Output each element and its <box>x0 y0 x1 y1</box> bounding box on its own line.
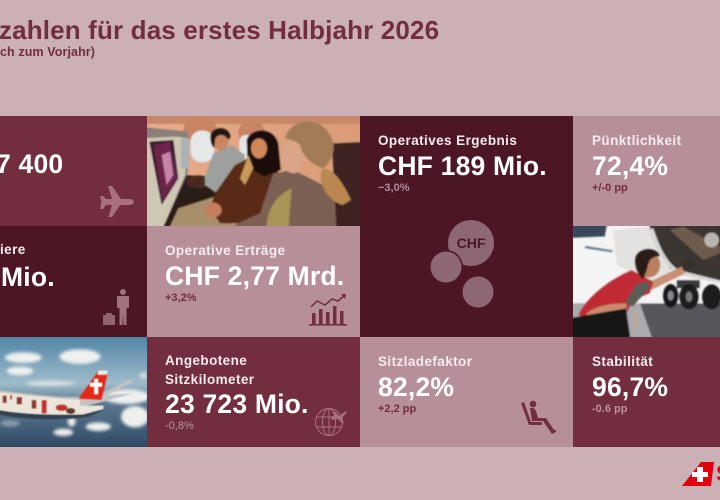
icon: rising chart <box>309 294 347 326</box>
load factor label: Sitzladefaktor <box>378 354 472 369</box>
panel: operating revenue <box>147 226 360 337</box>
result value: CHF 189 Mio. <box>378 151 547 181</box>
icon: passenger seat <box>521 400 556 434</box>
icon: globe with airplane <box>315 408 347 436</box>
punctuality value: 72,4% <box>592 151 668 181</box>
seat kilometres label: Sitzkilometer <box>165 372 254 387</box>
stability value: 96,7% <box>592 372 668 402</box>
stability change: -0.6 pp <box>592 403 627 415</box>
revenue change: +3,2% <box>165 292 196 304</box>
seat kilometres value: 23 723 Mio. <box>165 389 309 419</box>
result label: Operatives Ergebnis <box>378 133 517 148</box>
icon: traveller with suitcase <box>103 289 129 325</box>
panel: flights <box>0 116 147 226</box>
seat kilometres label: Angebotene <box>165 353 247 368</box>
panel: seat load factor <box>360 337 573 447</box>
revenue value: CHF 2,77 Mrd. <box>165 261 344 291</box>
load factor value: 82,2% <box>378 372 454 402</box>
panel: available seat kilometres <box>147 337 360 447</box>
photo: mechanic under aircraft <box>573 226 720 337</box>
panel: stability <box>573 337 720 447</box>
result change: −3,0% <box>378 182 410 194</box>
panel: operating result <box>360 116 573 337</box>
logo: SWISS tail and lettering <box>682 461 720 486</box>
stability label: Stabilität <box>592 354 653 369</box>
subtitle: ch zum Vorjahr) <box>0 45 95 59</box>
passengers value: Mio. <box>1 262 55 292</box>
panel: punctuality <box>573 116 720 226</box>
punctuality change: +/-0 pp <box>592 182 628 194</box>
load factor change: +2,2 pp <box>378 403 416 415</box>
panel: passengers <box>0 226 147 337</box>
icon: CHF coins: CHF <box>457 235 486 251</box>
seat kilometres change: -0,8% <box>165 420 194 432</box>
title: zahlen für das erstes Halbjahr 2026 <box>0 15 439 45</box>
photo: passengers in cabin <box>147 116 360 226</box>
revenue label: Operative Erträge <box>165 243 285 258</box>
punctuality label: Pünktlichkeit <box>592 133 681 148</box>
icon: CHF coins <box>430 220 494 308</box>
icon: airplane <box>100 186 134 217</box>
seat kilometres label <box>165 353 254 387</box>
passengers label: iere <box>0 242 26 257</box>
photo: Swiss aircraft above clouds <box>0 337 147 447</box>
